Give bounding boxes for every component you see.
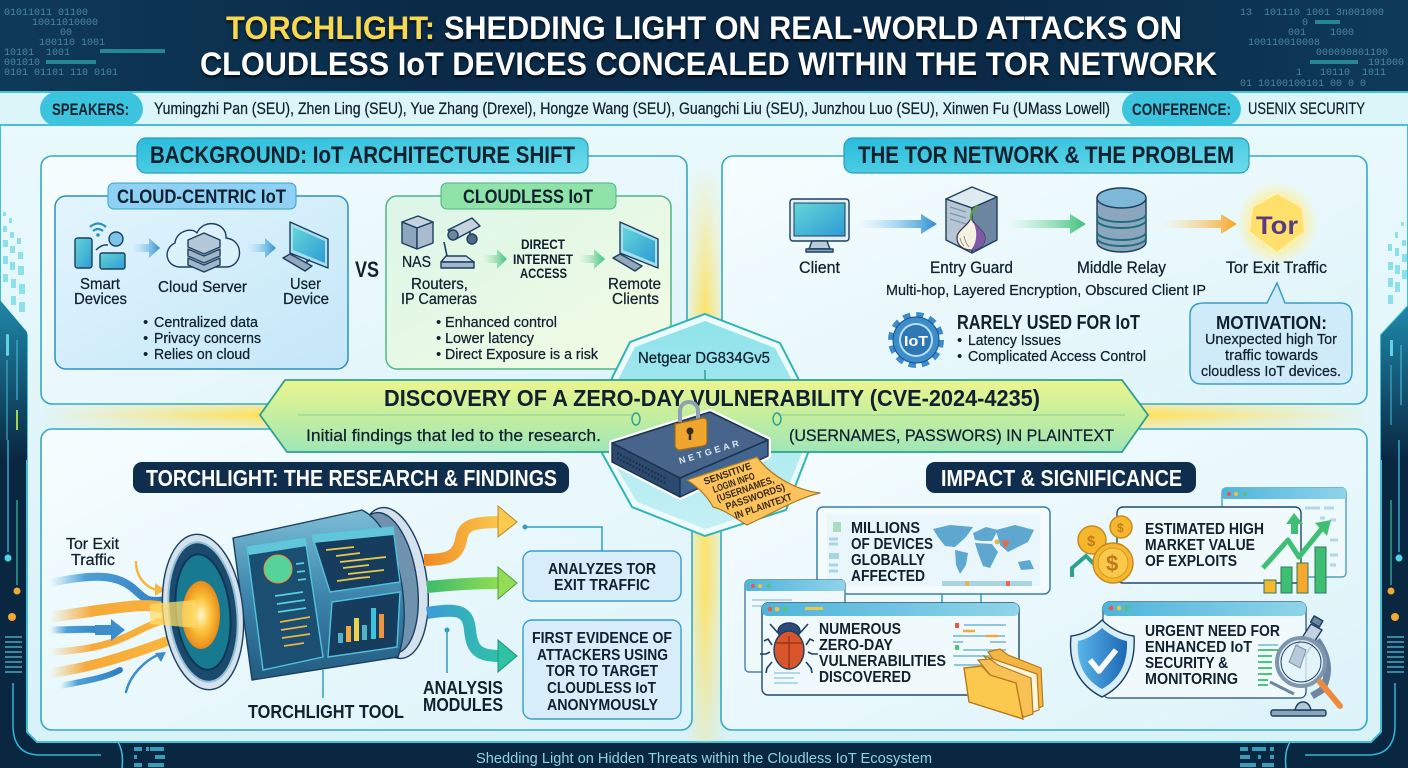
bullet list: cloudless: Direct Exposure is a risk: [445, 346, 598, 363]
speakers and conference bar: Yumingzhi Pan (SEU), Zhen Ling (SEU), Yue Zhang (Drexel), Hongze Wang (SEU), Guangchi Liu (SEU), Junzhou Luo (SEU), Xinwen Fu (UMass Lowell): [154, 100, 1110, 118]
icon: Netgear router with lock and leaked note: [612, 402, 820, 525]
label: Torchlight tool: TORCHLIGHT TOOL: [248, 702, 404, 722]
side circuit: left: [0, 300, 165, 768]
heading: background: BACKGROUND: IoT ARCHITECTURE SHIFT: [150, 142, 575, 169]
center octagon: Netgear device: [602, 314, 808, 536]
arrow: to direct access: [483, 249, 507, 269]
bullet list: cloud-centric: Privacy concerns: [154, 330, 261, 347]
labels: Tor hops: Tor Exit Traffic: [1226, 259, 1327, 277]
icon: Netgear router with lock and leaked note: NETGEAR: [678, 438, 740, 466]
bullet list: cloud-centric: Centralized data: [154, 314, 259, 331]
panel: Torchlight research and findings: [41, 429, 692, 730]
heading: Tor network: [844, 138, 1249, 173]
icon: remote client monitor: [613, 222, 658, 271]
arrow: guard to middle relay: [1008, 214, 1086, 234]
card: numerous zero-day vulnerabilities: NUMEROUS: [819, 621, 901, 638]
icon: IoT gear: IoT: [904, 333, 928, 350]
icon: world map: [933, 525, 1034, 586]
screen: bar chart panel: [328, 592, 400, 657]
header band with binary decoration: [0, 0, 1408, 93]
box: first evidence: FIRST EVIDENCE OF: [532, 630, 672, 647]
bullet list: cloudless: •: [436, 314, 441, 331]
heading: research: TORCHLIGHT: THE RESEARCH & FINDINGS: [146, 465, 557, 491]
card: urgent need: MONITORING: [1145, 671, 1238, 688]
banner: discovery of zero-day: DISCOVERY OF A ZERO-DAY VULNERABILITY (CVE-2024-4235): [384, 385, 1040, 411]
icon: user device monitor: [283, 222, 328, 271]
callout: motivation: MOTIVATION:: [1216, 313, 1327, 333]
arrow: green output: [427, 567, 517, 599]
sub-panel: cloudless IoT: [386, 183, 671, 369]
label: versus: VS: [355, 257, 379, 282]
box: first evidence: TOR TO TARGET: [546, 663, 658, 680]
screen: code panel: [312, 527, 400, 592]
icon: folders: [964, 649, 1043, 719]
card: numerous zero-day vulnerabilities: VULNERABILITIES: [819, 653, 946, 670]
panel: background IoT architecture shift: [41, 138, 687, 404]
icon: leaked note: [687, 457, 820, 525]
text: rarely used for IoT: •: [957, 332, 962, 349]
connector lines between cards: [942, 594, 981, 603]
label: remote clients: [608, 276, 661, 308]
callout: motivation: traffic towards: [1225, 347, 1318, 364]
bullet list: cloud-centric: Relies on cloud: [154, 346, 250, 363]
labels: Tor hops: Middle Relay: [1077, 259, 1167, 277]
header band with binary decoration: 001010: [4, 58, 40, 69]
card: millions of devices: MILLIONS: [851, 520, 920, 537]
icon: Tor exit badge: Tor: [1256, 212, 1298, 240]
labels: Tor hops: Entry Guard: [930, 259, 1013, 277]
labels: cloud-centric nodes: Cloud Server: [158, 279, 248, 296]
card: market value back window: [1222, 488, 1346, 577]
label: cloud-centric: CLOUD-CENTRIC IoT: [117, 186, 286, 208]
label: analysis modules: [423, 628, 503, 715]
label: remote clients: Remote: [608, 276, 661, 293]
card: millions of devices: OF DEVICES: [851, 536, 933, 553]
card: market value front window: ESTIMATED HIGH: [1145, 521, 1264, 538]
icon: microscope and magnifier: [1270, 616, 1340, 716]
box: analyzes Tor exit traffic: EXIT TRAFFIC: [554, 577, 650, 594]
heading: impact: IMPACT & SIGNIFICANCE: [941, 465, 1182, 491]
card: urgent need: ENHANCED IoT: [1145, 639, 1252, 656]
banner: discovery of zero-day: Initial findings that led to the research.: [306, 426, 601, 445]
bullet list: cloud-centric: •: [143, 314, 148, 331]
sub-panel: cloud-centric IoT: [55, 183, 348, 369]
side circuit: right: [1240, 306, 1408, 768]
footer tagline: Shedding Light on Hidden Threats within the Cloudless IoT Ecosystem: [476, 750, 932, 767]
card: urgent need: [1103, 602, 1306, 698]
icon: middle relay database: [1097, 188, 1146, 252]
arrow: devices to cloud: [132, 238, 160, 258]
label: direct internet access: INTERNET: [513, 251, 573, 267]
label: remote clients: Clients: [612, 291, 659, 308]
header band with binary decoration: 10011010000: [32, 18, 98, 29]
icon: coins: $: [1117, 521, 1124, 535]
arrow: cloud to user: [248, 238, 276, 258]
header band with binary decoration: 0: [1302, 18, 1308, 29]
arrow: to remote clients: [580, 249, 605, 269]
arrow: teal output: [427, 611, 517, 672]
icon: smart devices: [75, 224, 125, 269]
labels: cloud-centric nodes: Smart: [80, 276, 121, 293]
header band with binary decoration: 00: [60, 28, 72, 39]
panel: impact and significance: [721, 429, 1367, 730]
bullet list: cloud-centric: [143, 314, 261, 363]
connector stub under model label: [704, 370, 706, 380]
arrow: orange output: [424, 506, 517, 560]
callout: motivation: Unexpected high Tor: [1205, 331, 1337, 348]
bullet list: cloudless: Lower latency: [445, 330, 534, 347]
box: analyzes Tor exit traffic: [523, 551, 681, 601]
card: numerous zero-day vulnerabilities: DISCOVERED: [819, 669, 911, 686]
box: first evidence: [523, 620, 681, 719]
icon: coins: $: [1087, 533, 1096, 550]
box: first evidence: CLOUDLESS IoT: [547, 680, 656, 697]
title: TORCHLIGHT:: [226, 10, 435, 46]
speakers and conference bar: SPEAKERS:: [52, 100, 129, 119]
labels: cloudless devices: NAS: [402, 254, 431, 271]
labels: cloudless devices: Routers,: [411, 276, 468, 293]
text: rarely used for IoT: [957, 312, 1146, 365]
icon: leaked note: (USERNAMES,: [715, 475, 776, 505]
label: cloudless: CLOUDLESS IoT: [463, 186, 593, 208]
card: market value front window: MARKET VALUE: [1145, 537, 1255, 554]
label: direct internet access: DIRECT: [521, 236, 565, 252]
title: CLOUDLESS IoT DEVICES CONCEALED WITHIN THE TOR NETWORK: [200, 46, 1217, 82]
arrows: outputs: [424, 506, 517, 672]
icon: coins: $: [1106, 551, 1118, 576]
labels: cloud-centric nodes: Devices: [74, 291, 127, 308]
label: analysis modules: MODULES: [423, 695, 503, 715]
callout: motivation: [1190, 283, 1352, 384]
header band with binary decoration: 01 10100100101 00 0 0: [1240, 79, 1366, 90]
panel: Tor network and the problem: [722, 138, 1367, 404]
arrow: relay to exit: [1160, 214, 1237, 234]
header band with binary decoration: 001 1000: [1288, 28, 1354, 39]
card: urgent need: URGENT NEED FOR: [1145, 623, 1280, 640]
incoming traffic streams: [50, 562, 190, 692]
header band with binary decoration: 13 101110 1001 3n001000: [1240, 8, 1384, 19]
side decoration: right squares: [1388, 222, 1407, 304]
label: Tor exit traffic: Traffic: [71, 552, 115, 569]
labels: cloud-centric nodes: Device: [283, 291, 329, 308]
light stream entering lens: [150, 600, 196, 628]
text: multi-hop description: Multi-hop, Layered Encryption, Obscured Client IP: [886, 282, 1206, 299]
icon: client monitor: [790, 199, 849, 252]
labels: cloud-centric nodes: User: [290, 276, 322, 293]
icon: IP camera: [448, 218, 480, 244]
banner: discovery of zero-day: [260, 380, 1148, 452]
arrow: client to entry guard: [858, 214, 937, 234]
bullet list: cloud-centric: •: [143, 330, 148, 347]
box: analyzes Tor exit traffic: ANALYZES TOR: [548, 561, 656, 578]
header band with binary decoration: 1 10110 1011: [1296, 68, 1386, 79]
screen: left dashboard: [247, 538, 323, 670]
bullet list: cloudless: •: [436, 330, 441, 347]
bullet list: cloudless: Enhanced control: [445, 314, 557, 331]
icon: cloud server: [167, 224, 240, 272]
card: market value front window: OF EXPLOITS: [1145, 553, 1237, 570]
icon: coins: [1072, 516, 1133, 583]
header band with binary decoration: 000090801100: [1316, 48, 1388, 59]
side decoration: left squares: [3, 212, 25, 312]
icon: Torchlight tool cylinder: [155, 503, 437, 694]
card: market value front window: [1117, 507, 1301, 583]
header band with binary decoration: 191000: [1368, 58, 1404, 69]
header band with binary decoration: 10101 1001: [4, 48, 70, 59]
text: rarely used for IoT: Complicated Access Control: [968, 348, 1146, 365]
bullet list: cloudless: •: [436, 346, 441, 363]
labels: Tor hops: [799, 259, 1327, 277]
speakers and conference bar: [0, 92, 1408, 126]
card: urgent need: SECURITY &: [1145, 655, 1228, 672]
header band with binary decoration: 0101 01101 110 0101: [4, 68, 118, 79]
labels: cloudless devices: [401, 254, 477, 308]
heading: background: [137, 138, 588, 173]
icon: IoT gear: [892, 316, 940, 364]
card: millions of devices: AFFECTED: [851, 568, 925, 585]
icon: bug: [760, 623, 818, 673]
header band with binary decoration: 100110 1001: [39, 38, 105, 49]
title: [200, 10, 1217, 82]
icon: leaked note: LOGIN INFO: [711, 471, 757, 496]
icon: padlock: [675, 402, 707, 450]
icon: leaked note: PASSWORDS): [724, 482, 787, 513]
icon: router: [441, 242, 474, 268]
card: numerous zero-day vulnerabilities: ZERO-DAY: [819, 637, 893, 654]
banner: discovery of zero-day: (USERNAMES, PASSWORS) IN PLAINTEXT: [789, 426, 1114, 445]
speakers and conference bar: CONFERENCE:: [1132, 100, 1231, 119]
label: Tor exit traffic: [66, 536, 120, 569]
heading: Tor network: THE TOR NETWORK & THE PROBLEM: [858, 142, 1234, 169]
icon: NAS: [402, 216, 433, 249]
icon: shield with check: [1071, 620, 1134, 697]
header band with binary decoration: 100110010008: [1248, 38, 1320, 49]
icon: leaked note: SENSITIVE: [702, 461, 754, 488]
header band with binary decoration: 01011011 01100: [4, 8, 88, 19]
card: millions of devices: GLOBALLY: [851, 552, 925, 569]
box: first evidence: ATTACKERS USING: [537, 647, 668, 664]
light beams between panels: [51, 173, 1357, 742]
card: numerous zero-day vulnerabilities: [762, 603, 1019, 695]
text: rarely used for IoT: •: [957, 348, 962, 365]
bullet list: cloud-centric: •: [143, 346, 148, 363]
label: direct internet access: ACCESS: [520, 265, 567, 281]
text: rarely used for IoT: RARELY USED FOR IoT: [957, 312, 1140, 334]
label: Netgear model: Netgear DG834Gv5: [638, 350, 770, 367]
text: rarely used for IoT: Latency Issues: [968, 332, 1061, 349]
bullet list: cloudless: [436, 314, 598, 363]
labels: Tor hops: Client: [799, 259, 840, 277]
label: analysis modules: ANALYSIS: [423, 678, 503, 698]
title: SHEDDING LIGHT ON REAL-WORLD ATTACKS ON: [444, 10, 1182, 46]
speakers and conference bar: USENIX SECURITY: [1248, 100, 1365, 118]
card: millions of devices: [817, 507, 1050, 594]
callout: motivation: cloudless IoT devices.: [1201, 363, 1341, 380]
label: Tor exit traffic: Tor Exit: [66, 536, 120, 553]
icon: growth chart: [1263, 513, 1331, 593]
icon: Tor exit badge: [1235, 181, 1319, 265]
label: direct internet access: [513, 236, 573, 281]
labels: cloud-centric nodes: [74, 276, 329, 308]
icon: leaked note: IN PLAINTEXT: [733, 492, 794, 522]
box: first evidence: ANONYMOUSLY: [547, 697, 658, 714]
icon: entry guard server with onion: [946, 187, 997, 253]
labels: cloudless devices: IP Cameras: [401, 291, 477, 308]
connector to analyzes box: [525, 527, 602, 551]
card: zero-day back window: [745, 580, 845, 672]
